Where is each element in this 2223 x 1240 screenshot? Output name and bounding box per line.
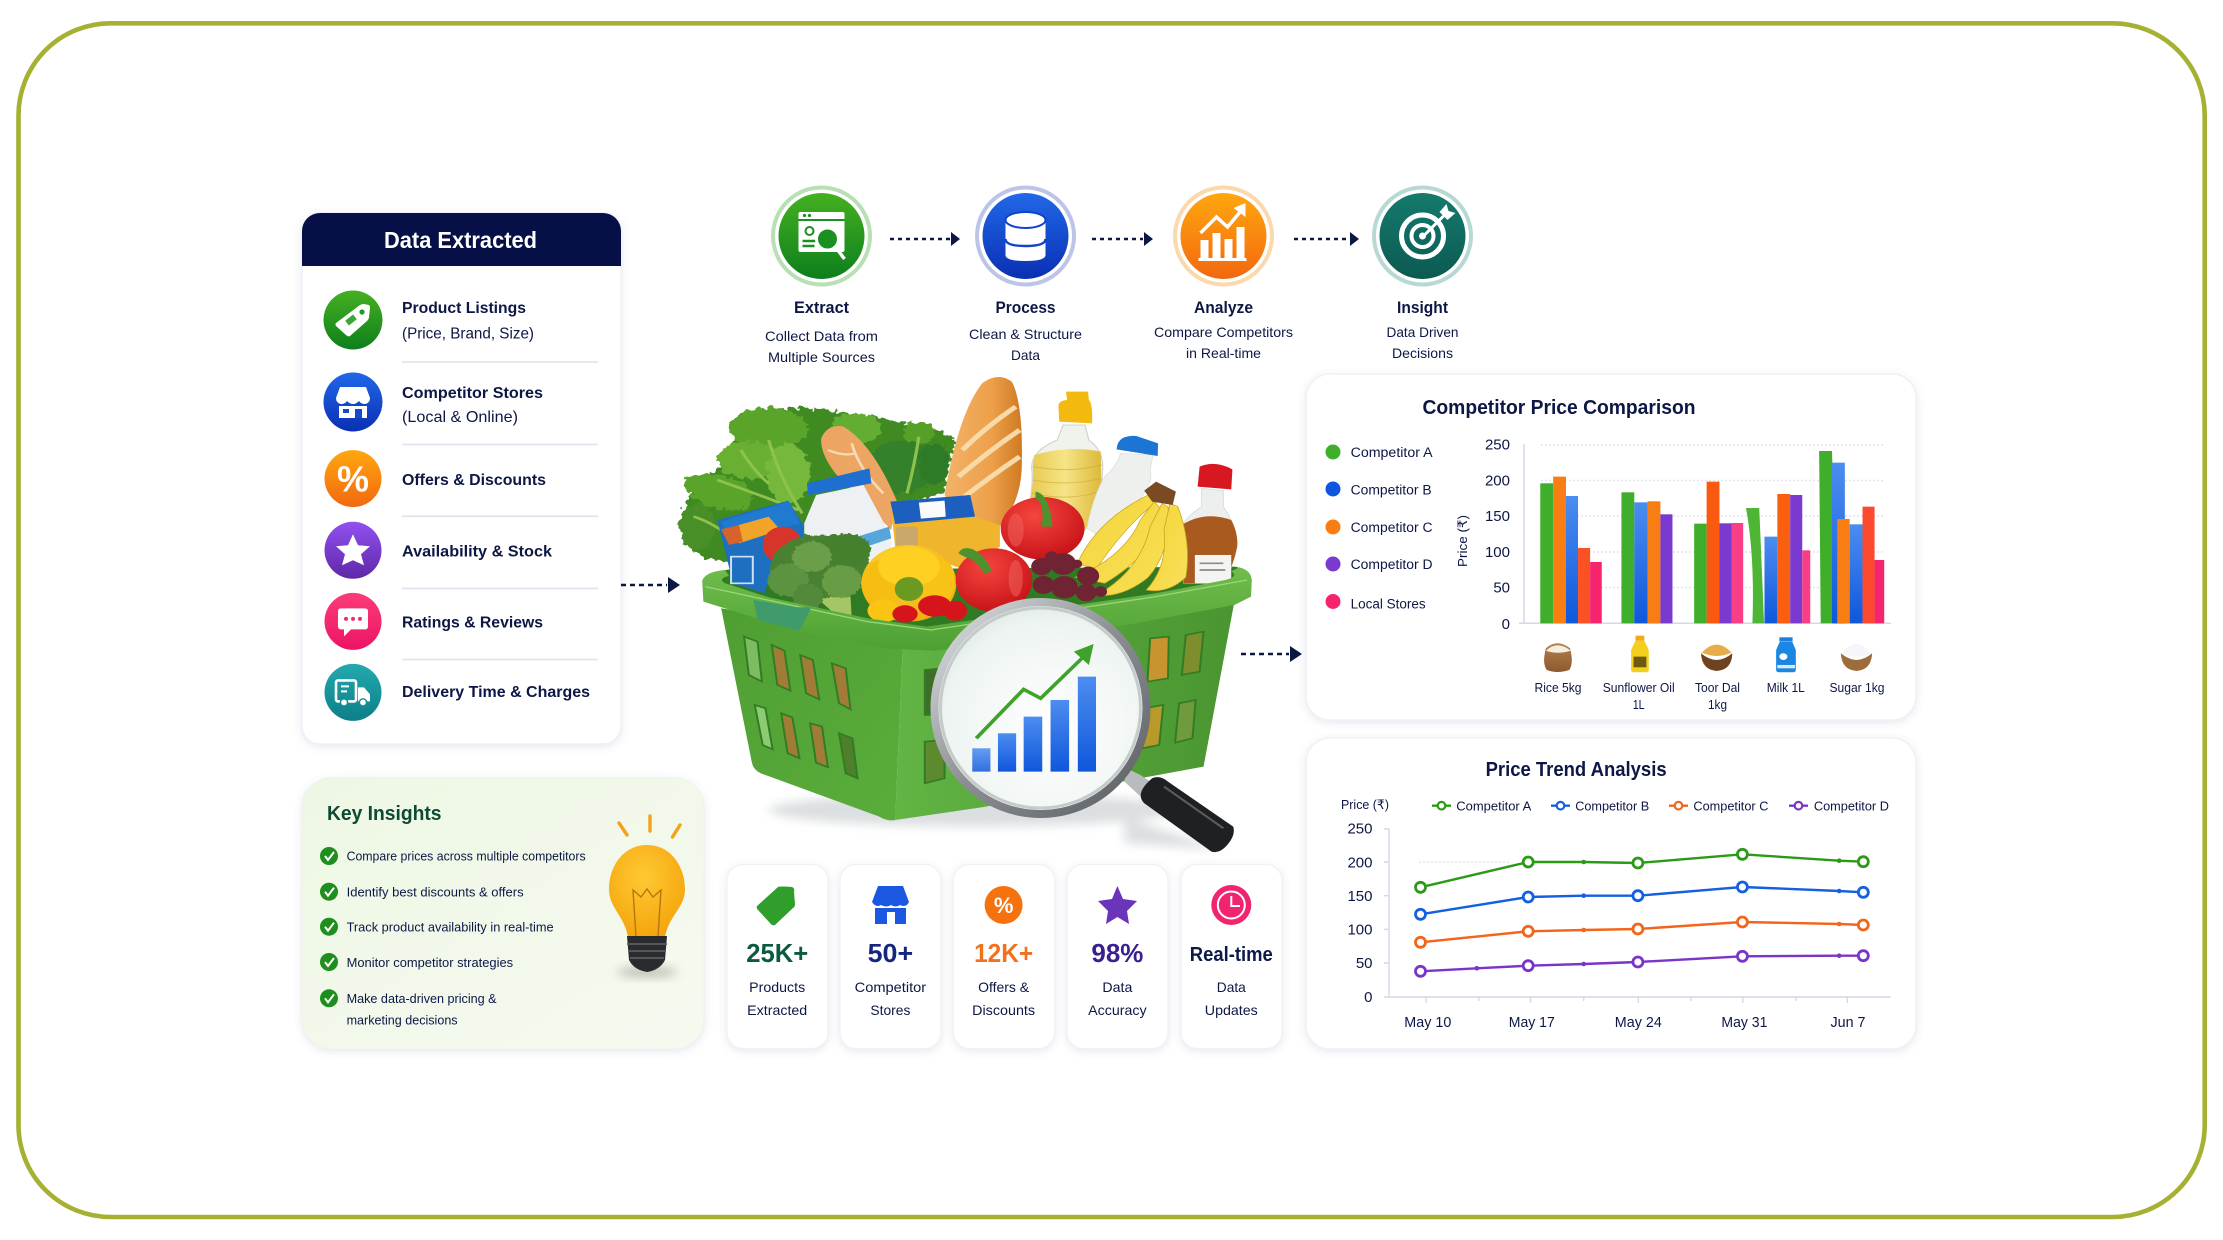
icon: percent <box>324 450 382 507</box>
bar chart <box>1540 451 1884 672</box>
legend: Competitor A <box>1456 798 1532 814</box>
panel: data extracted <box>302 213 621 744</box>
list item: delivery time and charges: Delivery Time & Charges <box>402 684 590 701</box>
line series: competitor a <box>1416 849 1868 892</box>
icon: sugar bowl <box>1841 644 1872 671</box>
x axis labels: May 10 <box>1404 1015 1451 1031</box>
red pepper: upper <box>1001 492 1085 560</box>
heading: key insights: Key Insights <box>327 803 442 825</box>
step text: insight: Data Driven <box>1386 324 1458 340</box>
icon: light bulb <box>609 816 685 977</box>
grapes <box>1031 551 1107 601</box>
line series: competitor d <box>1416 951 1868 976</box>
stat label: Stores <box>870 1002 910 1018</box>
leafy greens <box>679 408 956 562</box>
stat card: data accuracy <box>1067 864 1168 1048</box>
stat value: 12K+ <box>974 938 1033 968</box>
carton: blue box <box>717 501 804 593</box>
y axis labels: 0 <box>1502 616 1510 633</box>
line series: competitor b <box>1416 882 1868 919</box>
icon: milk bottle <box>1776 637 1796 672</box>
banana crown <box>1144 482 1176 505</box>
icon: purple star <box>1098 886 1137 924</box>
icon: store <box>324 372 382 432</box>
icon: green tag <box>757 886 795 925</box>
legend: Competitor C <box>1351 520 1433 535</box>
small bread <box>821 426 897 530</box>
bars: toor dal <box>1694 482 1743 623</box>
stat value: 98% <box>1091 938 1143 968</box>
y axis labels: 100 <box>1485 544 1510 561</box>
stat label: Products <box>749 979 805 995</box>
category labels: Toor Dal <box>1695 680 1740 695</box>
step label: analyze: Analyze <box>1194 298 1253 317</box>
y axis labels: 250 <box>1485 436 1510 454</box>
red pepper: lower <box>956 548 1032 612</box>
baguette <box>945 377 1022 527</box>
category labels: Sugar 1kg <box>1830 680 1884 695</box>
insight 2: Identify best discounts & offers <box>347 886 524 900</box>
category labels: Sunflower Oil <box>1603 680 1675 695</box>
step text: process <box>969 326 1082 363</box>
legend <box>1326 444 1433 612</box>
stat label <box>1088 979 1147 1018</box>
line series: competitor c <box>1416 917 1868 947</box>
magnifier handle <box>1124 768 1234 852</box>
axes <box>1519 444 1891 623</box>
legend: Local Stores <box>1351 596 1426 612</box>
y axis title: Price (₹) <box>1455 515 1470 567</box>
legend: Competitor C <box>1693 798 1768 814</box>
legend: Competitor D <box>1814 798 1889 814</box>
bars: sugar <box>1819 451 1884 623</box>
stat label <box>972 979 1035 1018</box>
insight 5: Make data-driven pricing & <box>347 992 497 1006</box>
basket interior <box>705 567 1251 630</box>
list item detail: price brand size: (Price, Brand, Size) <box>402 326 534 342</box>
list item: availability and stock: Availability & Stock <box>402 544 552 560</box>
insight 5: marketing decisions <box>347 1014 458 1028</box>
stat value: 50+ <box>868 938 913 968</box>
stat label: Data <box>1102 979 1133 995</box>
y axis labels: 0 <box>1364 989 1372 1006</box>
milk bottle <box>1087 436 1158 538</box>
y axis labels: 50 <box>1356 955 1372 972</box>
y axis labels: 200 <box>1485 472 1510 490</box>
insight 3: Track product availability in real-time <box>347 920 554 934</box>
category labels: 1kg <box>1708 697 1727 712</box>
step text: analyze <box>1154 324 1293 361</box>
stat label <box>747 979 807 1018</box>
stat card: offers and discounts <box>954 864 1054 1048</box>
stat label: Offers & <box>978 979 1030 995</box>
step text: analyze: Compare Competitors <box>1154 324 1293 340</box>
insight 5 <box>320 989 497 1028</box>
step text: extract: Multiple Sources <box>768 349 875 365</box>
list dividers <box>402 362 598 660</box>
icon: orange badge: % <box>994 893 1013 918</box>
stat card: real-time updates <box>1181 864 1282 1048</box>
carton: white pack <box>804 468 892 561</box>
oil bottle <box>1030 392 1103 530</box>
icon: star <box>324 522 382 579</box>
x axis labels: May 24 <box>1615 1015 1662 1031</box>
step text: extract <box>765 328 878 365</box>
list item: ratings and reviews: Ratings & Reviews <box>402 614 543 632</box>
grid lines <box>1541 445 1885 588</box>
basket rim <box>702 567 1252 651</box>
step text: process: Clean & Structure <box>969 326 1082 342</box>
step text: extract: Collect Data from <box>765 328 878 344</box>
category labels: Rice 5kg <box>1534 680 1582 695</box>
legend: Competitor B <box>1351 482 1432 498</box>
basket right face <box>895 602 1234 820</box>
lens chart: bars and rising arrow <box>972 644 1096 772</box>
icon: orange badge <box>985 886 1023 924</box>
stat label <box>1205 979 1258 1018</box>
step icon: process <box>977 188 1074 284</box>
list item: competitor stores: Competitor Stores <box>402 385 543 402</box>
ground shadow <box>769 793 1223 850</box>
stat label: Extracted <box>747 1002 807 1018</box>
step text: analyze: in Real-time <box>1186 345 1261 361</box>
icon: price tag <box>324 290 382 350</box>
y axis labels: 150 <box>1347 888 1372 905</box>
panel: competitor price comparison <box>1306 374 1916 720</box>
heading: data extracted: Data Extracted <box>384 227 537 253</box>
step label: insight: Insight <box>1397 298 1448 317</box>
bananas <box>1075 495 1188 596</box>
legend: Competitor D <box>1351 557 1433 572</box>
insight 4 <box>320 953 513 971</box>
panel header <box>302 213 621 266</box>
step label: extract: Extract <box>794 298 849 317</box>
step text: process: Data <box>1011 347 1040 363</box>
insight 4: Monitor competitor strategies <box>347 956 513 970</box>
arrow: extract to process <box>890 232 960 246</box>
axes and ticks <box>1384 829 1891 1003</box>
x axis labels: May 17 <box>1509 1015 1555 1031</box>
icon: blue store <box>872 886 909 924</box>
stat value: 25K+ <box>746 938 808 968</box>
step icon: analyze <box>1175 188 1272 284</box>
arrow: analyze to insight <box>1294 232 1359 246</box>
step text: insight <box>1386 324 1458 361</box>
icon: percent: % <box>337 459 369 500</box>
sauce bottle <box>1178 464 1237 583</box>
step text: insight: Decisions <box>1392 345 1453 361</box>
insight 2 <box>320 883 524 901</box>
icon: magnifying glass lens <box>934 602 1146 814</box>
panel: price trend analysis <box>1306 738 1916 1049</box>
stat label: Updates <box>1205 1002 1258 1018</box>
x axis labels: Jun 7 <box>1830 1015 1866 1031</box>
insight 1 <box>320 847 586 865</box>
insight 3 <box>320 918 554 936</box>
x axis labels <box>1404 1015 1866 1031</box>
arrow: basket to charts <box>1241 646 1302 662</box>
icon: delivery truck <box>324 664 382 721</box>
stat label <box>855 979 927 1018</box>
process flow <box>765 188 1471 365</box>
y axis labels: 150 <box>1485 508 1510 525</box>
y axis labels: 250 <box>1347 820 1372 838</box>
panel: key insights <box>302 778 704 1049</box>
stat label: Discounts <box>972 1002 1035 1018</box>
stat label: Accuracy <box>1088 1002 1147 1018</box>
step icon: insight <box>1374 188 1471 284</box>
stat card: products extracted <box>727 864 828 1048</box>
chart title: Price Trend Analysis <box>1486 759 1667 781</box>
basket rim highlight <box>705 580 1247 630</box>
basket left face <box>721 608 903 820</box>
y axis labels: 200 <box>1347 854 1372 872</box>
y axis labels <box>1347 820 1372 1006</box>
red tomatoes <box>892 595 967 623</box>
icon: pink clock <box>1211 885 1251 925</box>
list item: offers and discounts: Offers & Discounts <box>402 472 546 489</box>
list item: product listings: Product Listings <box>402 300 526 317</box>
chart title: Competitor Price Comparison <box>1422 397 1696 419</box>
arrow: data to basket <box>621 577 680 593</box>
legend: Competitor B <box>1575 798 1649 814</box>
bars: sunflower oil <box>1621 492 1672 623</box>
icon: oil bottle <box>1631 636 1649 672</box>
faint grid mark <box>1419 861 1510 863</box>
y axis labels <box>1485 436 1510 633</box>
category labels <box>1534 680 1884 712</box>
broccoli <box>768 533 871 617</box>
legend <box>1432 798 1889 814</box>
stat label: Data <box>1217 979 1246 995</box>
step icon: extract <box>773 188 870 284</box>
illustration: grocery basket <box>679 377 1252 852</box>
icon: toor dal bowl <box>1701 645 1732 671</box>
icon: rice sack <box>1544 643 1572 672</box>
greens stems <box>693 437 919 530</box>
insight 1: Compare prices across multiple competitors <box>347 850 586 864</box>
step label: process: Process <box>996 298 1056 317</box>
stat value: Real-time <box>1190 944 1273 966</box>
basket rim clip <box>754 600 811 631</box>
stat card: competitor stores <box>840 864 941 1048</box>
basket windows <box>744 632 1204 783</box>
icon: chat bubble <box>324 593 382 650</box>
legend: Competitor A <box>1351 445 1433 460</box>
x axis labels: May 31 <box>1721 1015 1767 1031</box>
category labels: Milk 1L <box>1767 680 1805 695</box>
arrow: process to analyze <box>1092 232 1153 246</box>
bars: milk <box>1746 494 1810 623</box>
y axis labels: 50 <box>1493 580 1510 596</box>
bars: rice <box>1540 477 1602 623</box>
y axis labels: 100 <box>1347 922 1372 938</box>
list item detail: local and online: (Local & Online) <box>402 409 518 426</box>
carton: blue and yellow box <box>890 495 1000 570</box>
y axis title: Price (₹) <box>1341 797 1389 812</box>
yellow pepper <box>861 545 956 622</box>
category labels: 1L <box>1633 697 1645 712</box>
stat label: Competitor <box>855 979 927 995</box>
